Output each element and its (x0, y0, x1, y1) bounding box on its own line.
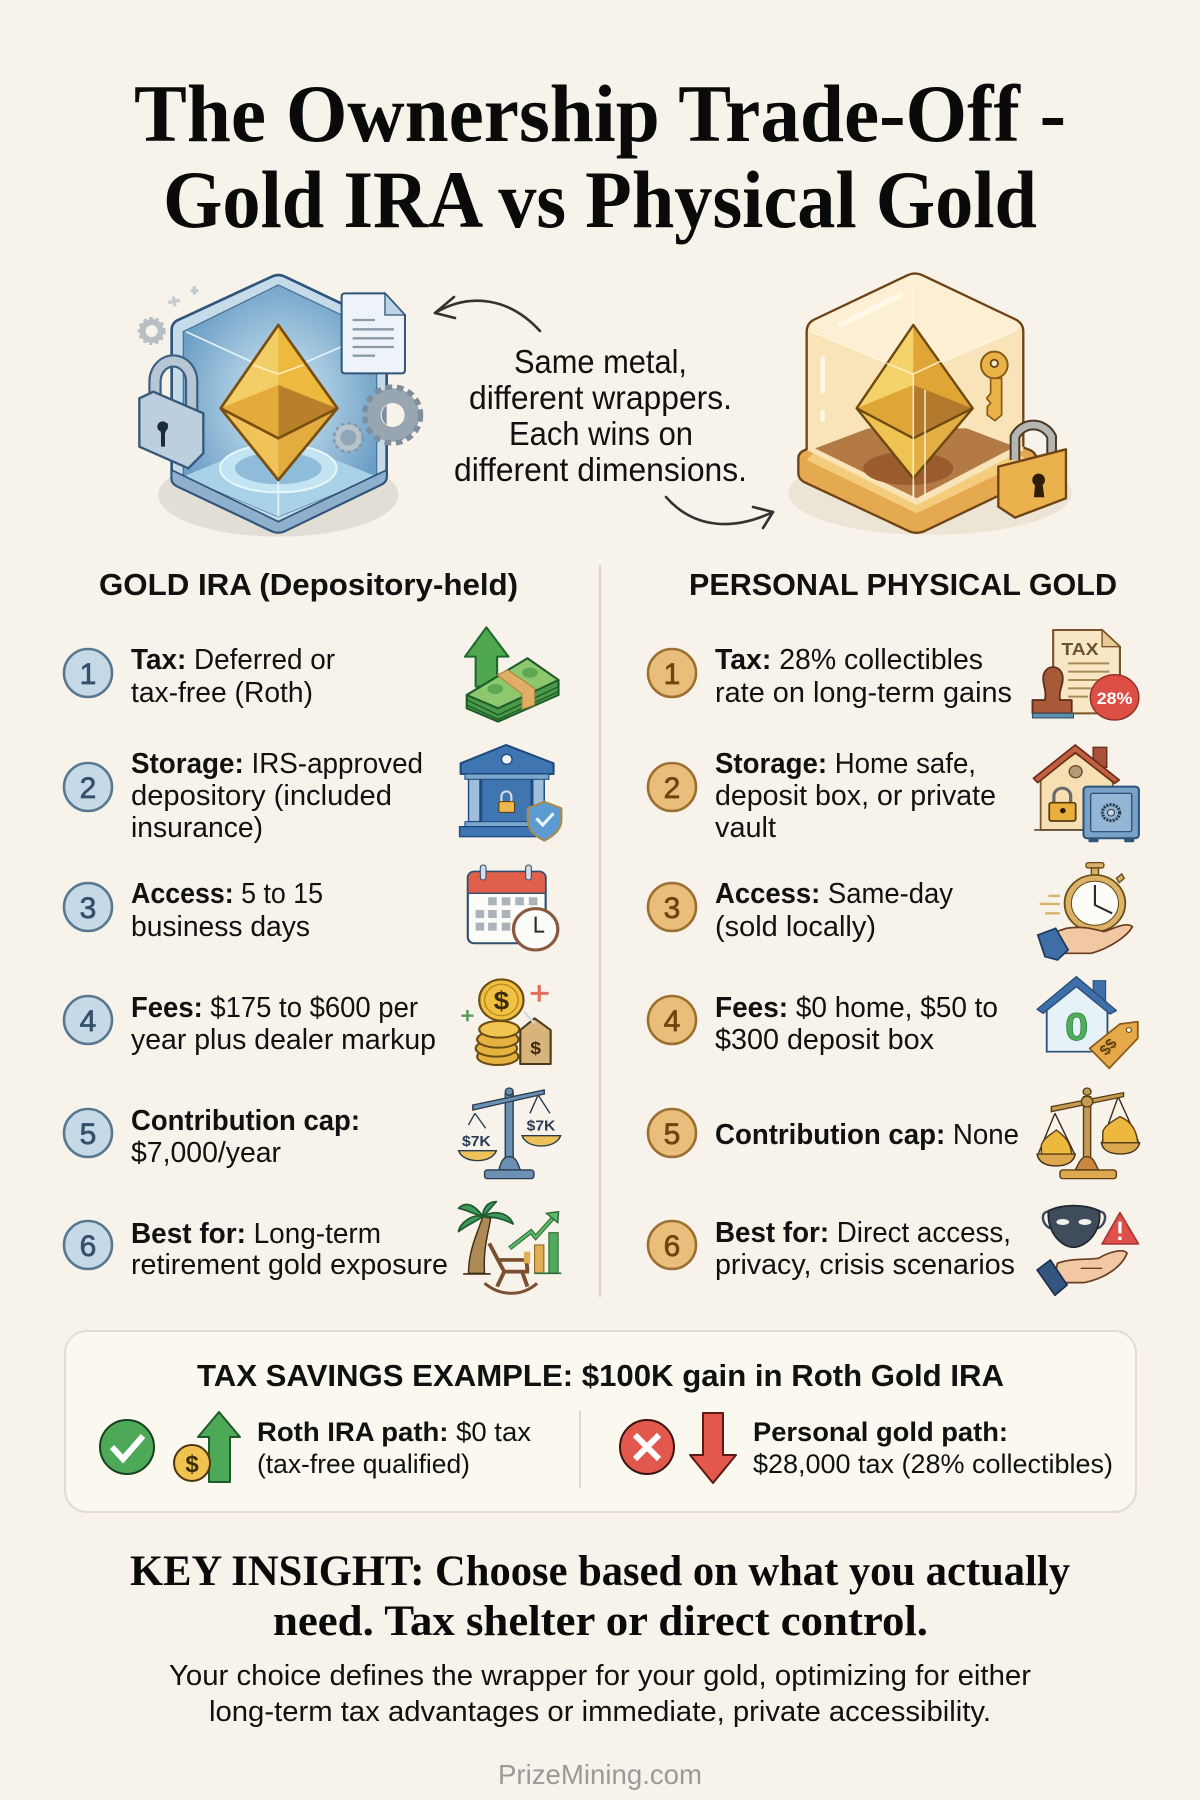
padlock (998, 425, 1066, 518)
row 5 Contribution cap: Contribution cap: (131, 1105, 360, 1137)
row 5 Contribution cap: 5 (664, 1118, 680, 1151)
icon: balance scale (459, 1088, 561, 1179)
row 1 Tax: Tax: 28% collectibles (715, 644, 983, 676)
row 2 Storage: insurance) (131, 812, 263, 844)
row 4 Fees: Fees: $175 to $600 per (131, 992, 418, 1024)
key insight heading: need. Tax shelter or direct control. (273, 1598, 928, 1645)
intro text: different wrappers. (469, 379, 732, 416)
icon: balance scale: $7K (462, 1133, 491, 1150)
row 3 Access: 3 (80, 892, 96, 925)
arrow: to physical gold (666, 497, 773, 528)
title (134, 68, 1066, 245)
icon: house and safe (1034, 745, 1139, 842)
gears and padlock (139, 286, 421, 468)
illustration: gold physical cube (788, 273, 1072, 535)
intro text: Each wins on (509, 415, 693, 452)
row 5 Contribution cap: Contribution cap: None (715, 1119, 1019, 1151)
row 1 Tax: Tax: Deferred or (131, 644, 335, 676)
arrow: to Gold IRA (435, 297, 540, 331)
icon: house with zero and fee tag: $$ (1096, 1035, 1121, 1059)
icon: coins and price tag: $ (494, 986, 509, 1015)
panel: Gold IRA rows (64, 627, 561, 1293)
row 4 Fees (64, 992, 436, 1056)
row 3 Access: Access: Same-day (715, 878, 954, 910)
row 2 Storage: vault (715, 812, 776, 844)
icon: up arrow with coin: $ (185, 1451, 199, 1478)
row 5 Contribution cap (64, 1105, 360, 1169)
row 5 Contribution cap: $7,000/year (131, 1137, 282, 1169)
row 6 Best for (648, 1217, 1015, 1281)
icon: up arrow with coin (174, 1412, 240, 1482)
icon: tax document, stamp and 28 percent badge: 28% (1097, 689, 1132, 708)
Roth path text: Roth IRA path: $0 tax (257, 1417, 531, 1447)
row 3 Access: Access: 5 to 15 (131, 878, 323, 910)
row 2 Storage (648, 748, 996, 844)
icon: coins and price tag: $ (530, 1038, 542, 1058)
row 4 Fees (648, 992, 998, 1056)
personal path text: Personal gold path: (753, 1417, 1008, 1447)
icon: red cross (620, 1420, 674, 1474)
personal path text: $28,000 tax (28% collectibles) (753, 1449, 1113, 1479)
Roth path text: (tax-free qualified) (257, 1449, 470, 1479)
row 6 Best for: 6 (664, 1230, 680, 1263)
icon: green check (100, 1420, 154, 1474)
icon: gold balance scale (1037, 1088, 1140, 1179)
row 1 Tax (64, 644, 335, 709)
intro text (454, 343, 747, 488)
Roth path text (257, 1417, 531, 1479)
right column heading: PERSONAL PHYSICAL GOLD (689, 567, 1117, 602)
illustration: blue Gold IRA vault (139, 275, 421, 537)
icon: money and up arrow (465, 627, 559, 722)
row 4 Fees: Fees: $0 home, $50 to (715, 992, 998, 1024)
intro text: Same metal, (514, 343, 687, 380)
row 6 Best for: privacy, crisis scenarios (715, 1249, 1015, 1281)
row 4 Fees: $300 deposit box (715, 1024, 934, 1056)
icon: tax document, stamp and 28 percent badge (1032, 630, 1139, 720)
row 4 Fees: 4 (664, 1005, 680, 1038)
title: Gold IRA vs Physical Gold (163, 154, 1037, 245)
row 1 Tax (648, 644, 1012, 709)
tax savings heading: TAX SAVINGS EXAMPLE: $100K gain in Roth Gold IRA (197, 1358, 1004, 1393)
icon: mask, warning and hand (1037, 1206, 1139, 1295)
footer source: PrizeMining.com (498, 1759, 702, 1790)
icon: red down arrow (690, 1413, 736, 1483)
row 3 Access: 3 (664, 892, 680, 925)
document (342, 293, 405, 373)
row 1 Tax: 1 (80, 658, 96, 691)
icon: bank (460, 745, 561, 841)
row 6 Best for: Best for: Direct access, (715, 1217, 1011, 1249)
icon: tax document, stamp and 28 percent badge: TAX (1061, 639, 1099, 659)
row 3 Access (648, 878, 954, 943)
personal path text (753, 1417, 1113, 1479)
icon: palm, rocking chair and growth chart (459, 1202, 561, 1293)
row 2 Storage: depository (included (131, 780, 392, 812)
key insight body: long-term tax advantages or immediate, private accessibility. (209, 1696, 991, 1728)
key insight heading: KEY INSIGHT: Choose based on what you actually (130, 1548, 1070, 1595)
key (981, 352, 1008, 421)
row 2 Storage: Storage: Home safe, (715, 748, 976, 780)
panel: tax savings example (65, 1331, 1136, 1512)
row 2 Storage: 2 (664, 772, 680, 805)
icon: balance scale: $7K (527, 1118, 555, 1135)
intro text: different dimensions. (454, 451, 747, 488)
icon: house with zero and fee tag (1037, 977, 1138, 1068)
key insight heading (130, 1548, 1070, 1645)
icon: stopwatch in hand (1038, 863, 1132, 960)
icon: house with zero and fee tag: 0 (1065, 1004, 1088, 1049)
row 6 Best for: Best for: Long-term (131, 1218, 381, 1250)
row 3 Access: (sold locally) (715, 911, 876, 943)
row 2 Storage: Storage: IRS-approved (131, 748, 423, 780)
row 6 Best for (64, 1218, 448, 1281)
title: The Ownership Trade-Off - (134, 68, 1066, 159)
key insight body (169, 1660, 1031, 1728)
row 5 Contribution cap (648, 1109, 1019, 1157)
left column heading: GOLD IRA (Depository-held) (99, 567, 518, 602)
panel: personal gold rows (648, 630, 1140, 1295)
row 2 Storage (64, 748, 423, 844)
row 2 Storage: deposit box, or private (715, 780, 996, 812)
icon: coins and price tag (461, 979, 551, 1065)
key insight body: Your choice defines the wrapper for your gold, optimizing for either (169, 1660, 1031, 1692)
row 1 Tax: tax-free (Roth) (131, 677, 313, 709)
row 5 Contribution cap: 5 (80, 1118, 96, 1151)
row 1 Tax: 1 (664, 658, 680, 691)
row 3 Access: business days (131, 911, 310, 943)
icon: calendar and clock (468, 865, 558, 950)
row 1 Tax: rate on long-term gains (715, 677, 1012, 709)
row 6 Best for: retirement gold exposure (131, 1249, 448, 1281)
row 2 Storage: 2 (80, 772, 96, 805)
row 3 Access (64, 878, 323, 943)
row 6 Best for: 6 (80, 1230, 96, 1263)
row 4 Fees: 4 (80, 1005, 96, 1038)
row 4 Fees: year plus dealer markup (131, 1024, 436, 1056)
